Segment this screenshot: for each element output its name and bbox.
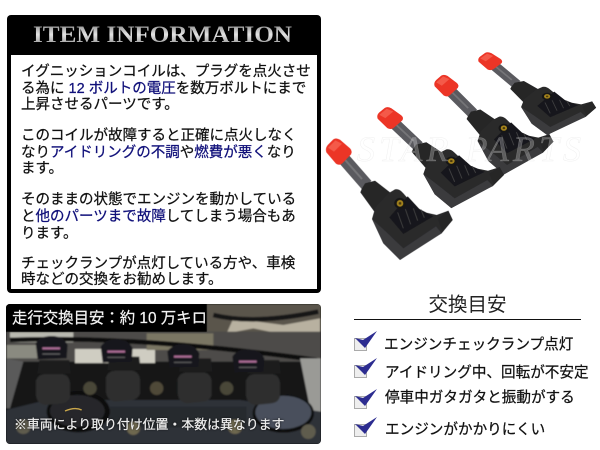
- paragraph: what the coil does: る為に 12 ボルトの電圧を数万ボルトにまで: [21, 81, 306, 97]
- paragraph: risk of further damage: そのままの状態でエンジンを動かしている: [21, 192, 296, 208]
- check item: engine lamp: [354, 331, 573, 353]
- checklist: symptoms: [354, 331, 589, 438]
- check item: vibration when stopped: 停車中ガタガタと振動がする: [385, 390, 575, 406]
- paragraph: failure symptoms: [21, 127, 296, 177]
- panel body: [11, 55, 317, 289]
- check item: hard starting: エンジンがかかりにくい: [385, 422, 545, 438]
- product photo: four ignition coils: [326, 52, 596, 260]
- paragraph: failure symptoms: なりアイドリングの不調や燃費が悪くなり: [21, 145, 296, 161]
- coil 2: [377, 107, 504, 208]
- photo caption: replacement interval: 走行交換目安：約 10 万キロ: [12, 310, 207, 327]
- heading: replacement guide: 交換目安: [428, 294, 506, 316]
- paragraph: risk of further damage: ります。: [21, 226, 78, 242]
- heading: replacement guide: [354, 293, 581, 320]
- paragraph: what the coil does: 上昇させるパーツです。: [21, 97, 179, 113]
- paragraph: recommendation: [21, 255, 296, 288]
- paragraph: risk of further damage: [21, 191, 296, 242]
- paragraph: failure symptoms: このコイルが故障すると正確に点火しなく: [21, 128, 296, 144]
- paragraph: what the coil does: イグニッションコイルは、プラグを点火させ: [21, 64, 311, 80]
- photo panel: engine bay: [6, 304, 321, 444]
- paragraph: recommendation: チェックランプが点灯している方や、車検: [21, 256, 295, 272]
- check item: engine lamp: エンジンチェックランプ点灯: [384, 337, 573, 353]
- paragraph: risk of further damage: と他のパーツまで故障してしまう場合もあ: [21, 209, 296, 225]
- coil 1 (front): [326, 138, 453, 260]
- product photo: four ignition coils: STAR PARTS: [357, 129, 581, 169]
- check item: vibration when stopped: [354, 389, 575, 409]
- panel heading: ITEM INFORMATION: ITEM INFORMATION: [33, 22, 292, 47]
- coil 3: [434, 75, 553, 175]
- panel: item information: [7, 15, 321, 293]
- check item: unstable idle: アイドリング中、回転が不安定: [385, 365, 589, 381]
- check item: unstable idle: [354, 358, 589, 381]
- engine photo: [6, 304, 321, 444]
- check item: hard starting: [354, 417, 545, 438]
- paragraph: what the coil does: [21, 63, 311, 113]
- coil 4 (rear): [478, 52, 596, 135]
- paragraph: recommendation: 時などの交換をお勧めします。: [21, 272, 223, 288]
- paragraph: failure symptoms: ます。: [21, 161, 63, 177]
- photo note: positions vary by vehicle: ※車両により取り付け位置・本数は異なります: [14, 417, 284, 432]
